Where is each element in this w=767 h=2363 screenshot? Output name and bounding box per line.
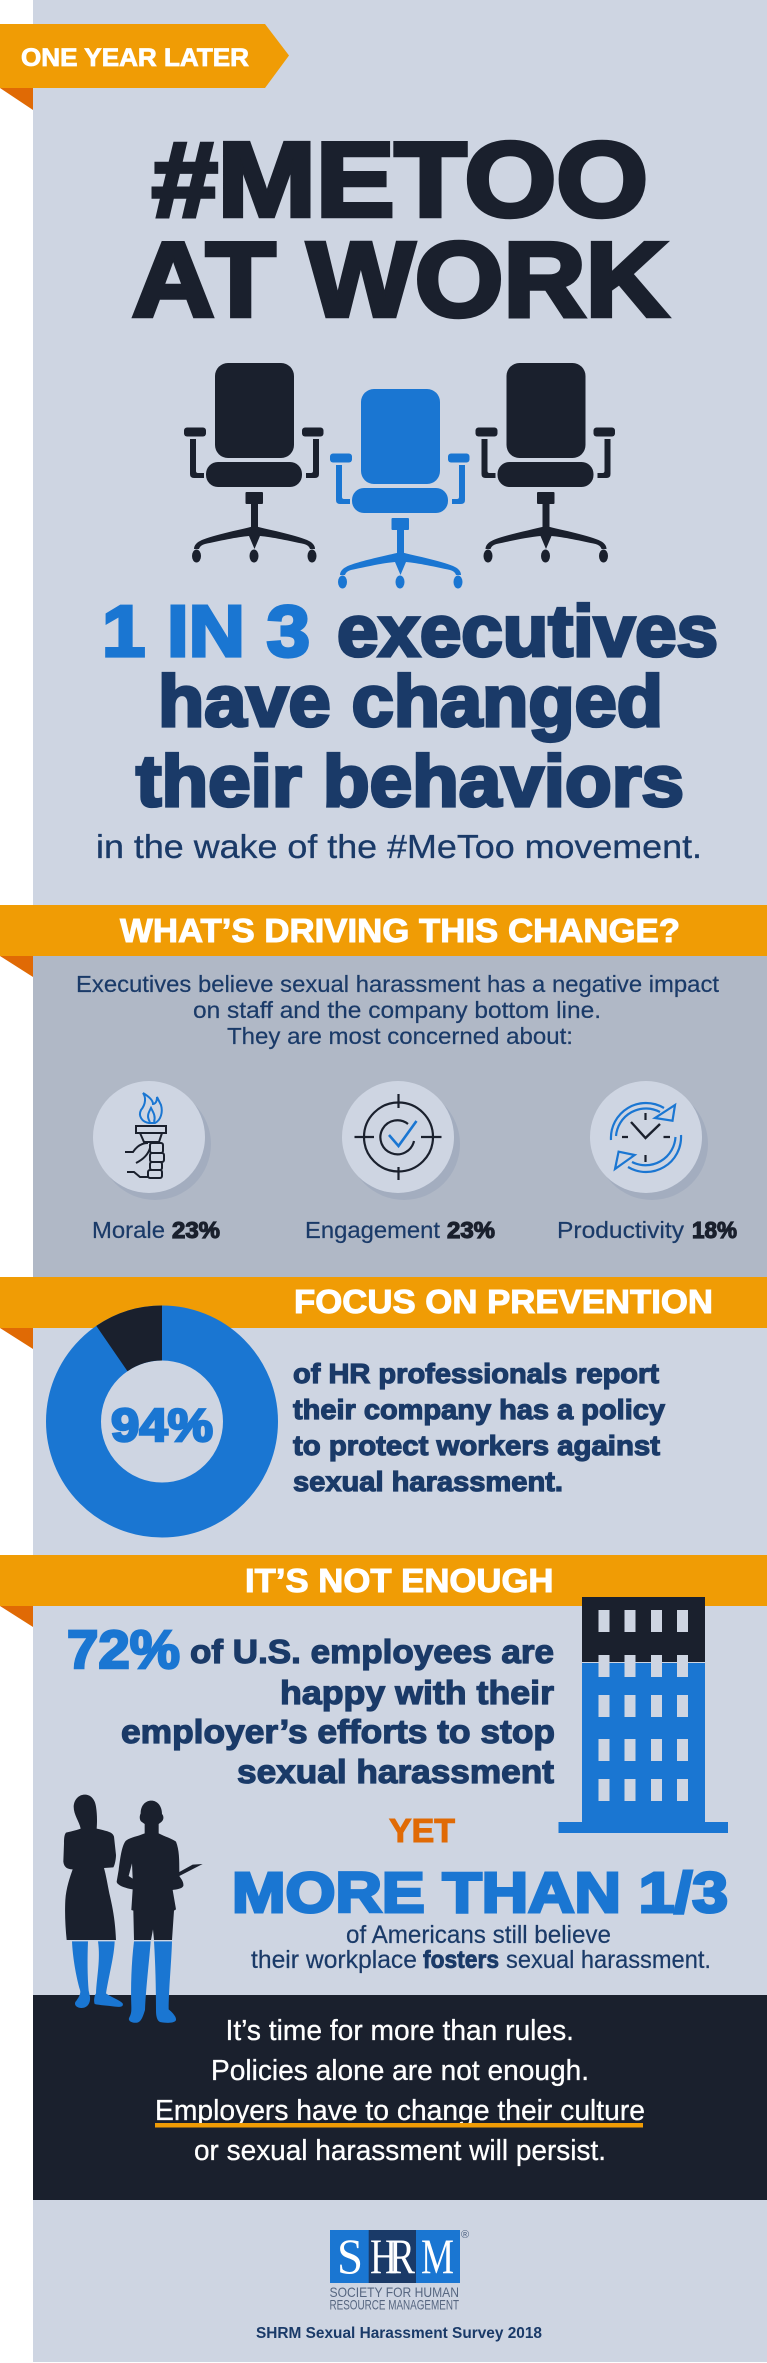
text: HR policy statistic	[293, 1358, 665, 1497]
text: of Americans still believe	[251, 1921, 711, 1974]
logo: SHRM: H	[370, 2228, 397, 2284]
closing text: It’s time for more than rules.	[226, 2015, 574, 2047]
icon: right dark chair	[476, 363, 615, 562]
text: of Americans still believe: fosters	[423, 1946, 499, 1974]
title: AT WORK	[132, 221, 668, 339]
title: #METOO	[152, 121, 648, 239]
icon: morale torch	[93, 1081, 211, 1200]
stat: 72% of employees: sexual harassment	[237, 1753, 554, 1790]
donut chart: 94%	[74, 1306, 250, 1510]
logo: SHRM: S	[337, 2228, 363, 2284]
intro text: They are most concerned about:	[227, 1023, 573, 1049]
icon: centre blue chair	[330, 389, 470, 588]
label: engagement: 23%	[447, 1217, 495, 1243]
headline statistic: executives	[337, 592, 718, 672]
ribbon heading: focus on prevention	[0, 1277, 767, 1349]
logo: SHRM: R	[389, 2228, 415, 2284]
label: productivity: 18%	[692, 1217, 737, 1243]
text: of Americans still believe: sexual harassment.	[506, 1946, 711, 1974]
panel: what's driving this change	[0, 905, 767, 1277]
text: of Americans still believe: of Americans still believe	[346, 1921, 611, 1949]
headline statistic	[102, 592, 718, 822]
stat: 72% of employees	[67, 1620, 555, 1790]
text: HR policy statistic: sexual harassment.	[293, 1466, 563, 1497]
label: productivity	[557, 1217, 737, 1243]
intro text: Executives believe sexual harassment has a negative impact	[76, 971, 720, 997]
label: productivity: Productivity	[557, 1217, 685, 1243]
logo: SHRM: SOCIETY FOR HUMAN	[330, 2284, 459, 2300]
text: HR policy statistic: of HR professionals report	[293, 1358, 659, 1389]
stat: 72% of employees: 72%	[67, 1620, 180, 1680]
icon: office building	[558, 1597, 728, 1833]
headline statistic: have changed	[158, 662, 663, 742]
word: yet: YET	[389, 1812, 455, 1849]
closing text: Policies alone are not enough.	[211, 2055, 589, 2087]
stat: 72% of employees: employer’s efforts to stop	[121, 1713, 555, 1750]
logo: SHRM: ®	[461, 2229, 469, 2241]
logo: SHRM	[330, 2228, 469, 2312]
ribbon heading: it's not enough	[0, 1555, 767, 1627]
logo: SHRM: M	[421, 2228, 454, 2284]
ribbon heading: focus on prevention: FOCUS ON PREVENTION	[294, 1283, 713, 1320]
ribbon: one year later: ONE YEAR LATER	[21, 44, 249, 72]
closing text	[155, 2015, 645, 2167]
panel: closing message	[33, 1995, 767, 2200]
text: HR policy statistic: their company has a policy	[293, 1394, 665, 1425]
stat: 72% of employees: of U.S. employees are	[190, 1633, 554, 1670]
label: morale	[92, 1217, 220, 1243]
text: HR policy statistic: to protect workers against	[293, 1430, 660, 1461]
label: morale: Morale	[92, 1217, 165, 1243]
donut chart: 94%: 94%	[111, 1399, 213, 1451]
headline statistic: 1 IN 3	[102, 592, 310, 672]
icon: productivity clock	[590, 1081, 708, 1200]
text: of Americans still believe: their workplace	[251, 1946, 417, 1974]
stat: more than 1/3: MORE THAN 1/3	[232, 1861, 728, 1925]
logo: SHRM: RESOURCE MANAGEMENT	[330, 2296, 459, 2312]
title	[132, 121, 668, 339]
intro text: on staff and the company bottom line.	[193, 997, 601, 1023]
closing text: Employers have to change their culture	[155, 2095, 645, 2127]
label: morale: 23%	[172, 1217, 220, 1243]
stat: 72% of employees: happy with their	[280, 1674, 554, 1711]
icon: left dark chair	[184, 363, 324, 562]
label: engagement	[305, 1217, 495, 1243]
intro text	[76, 971, 720, 1049]
ribbon heading: what's driving this change	[0, 905, 767, 977]
ribbon heading: it's not enough: IT’S NOT ENOUGH	[245, 1562, 554, 1599]
label: engagement: Engagement	[305, 1217, 441, 1243]
closing text: or sexual harassment will persist.	[194, 2135, 606, 2167]
ribbon heading: what's driving this change: WHAT’S DRIVING THIS CHANGE?	[120, 912, 680, 949]
icon: engagement target	[342, 1081, 460, 1200]
underline highlight	[155, 2123, 643, 2128]
source line: SHRM Sexual Harassment Survey 2018	[256, 2325, 542, 2342]
ribbon: one year later	[0, 24, 289, 110]
illustration: two people silhouettes	[63, 1795, 203, 2023]
headline statistic: their behaviors	[136, 742, 684, 822]
subheading: in the wake of the #MeToo movement.	[96, 828, 702, 865]
